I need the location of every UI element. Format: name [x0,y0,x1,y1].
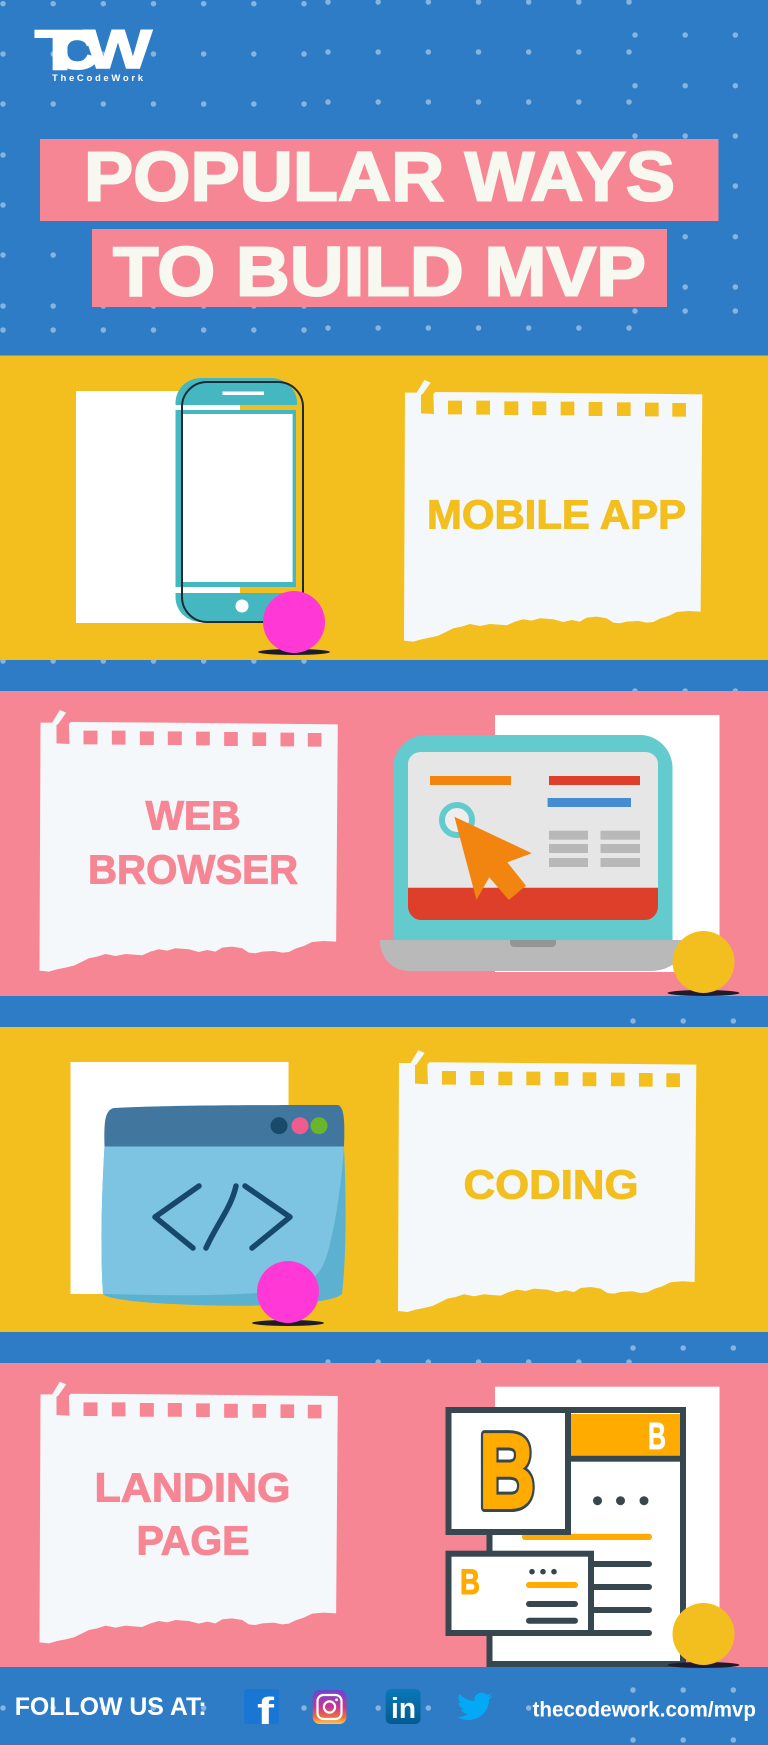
note card: mobile app [404,380,702,642]
icon: facebook [244,1689,279,1733]
note card: coding [398,1050,696,1312]
icon: linkedin [386,1689,420,1725]
logo: TheCodeWork: C [54,23,98,79]
note card: coding: CODING [464,1162,638,1208]
title line two: TO BUILD MVP [113,232,646,310]
title [40,138,718,310]
logo: TheCodeWork [35,18,152,84]
follow label: FOLLOW US AT: [15,1693,207,1721]
icon: landing page wireframe: B [460,1563,480,1602]
icon: twitter [457,1693,493,1720]
icon: landing page wireframe [448,1387,720,1664]
note card: mobile app: MOBILE APP [427,492,686,538]
logo: TheCodeWork: W [84,18,152,80]
note card: web browser: BROWSER [88,846,298,892]
shadow [258,649,330,655]
note card: web browser: WEB [146,792,240,838]
panel: web browser [0,691,768,996]
icon: code window [70,1062,346,1306]
icon: smartphone [76,378,303,623]
ball [672,931,734,993]
note card: web browser [39,710,338,972]
icon: facebook: f [257,1691,274,1733]
logo: TheCodeWork: TheCodeWork [52,73,144,84]
panel: landing page [0,1363,768,1668]
icon: instagram [313,1690,346,1724]
website url: thecodework.com/mvp [532,1698,756,1722]
panel: coding [0,1027,768,1332]
shadow [668,990,740,996]
note card: landing page: LANDING [94,1464,290,1510]
note card: landing page: PAGE [136,1518,250,1564]
icon: laptop with cursor [380,715,720,972]
icon: linkedin: in [391,1693,416,1725]
logo: TheCodeWork: T [35,18,85,81]
shadow [252,1320,324,1326]
ball [263,591,325,653]
title line one: POPULAR WAYS [84,138,675,216]
footer [15,1689,756,1733]
icon: landing page wireframe: B [479,1412,535,1530]
panel: mobile app [0,356,768,660]
shadow [668,1662,740,1668]
icon: landing page wireframe: B [648,1416,666,1458]
ball [672,1603,734,1665]
ball [257,1261,319,1323]
note card: landing page [39,1382,338,1643]
icon: landing page wireframe: B [479,1412,535,1530]
